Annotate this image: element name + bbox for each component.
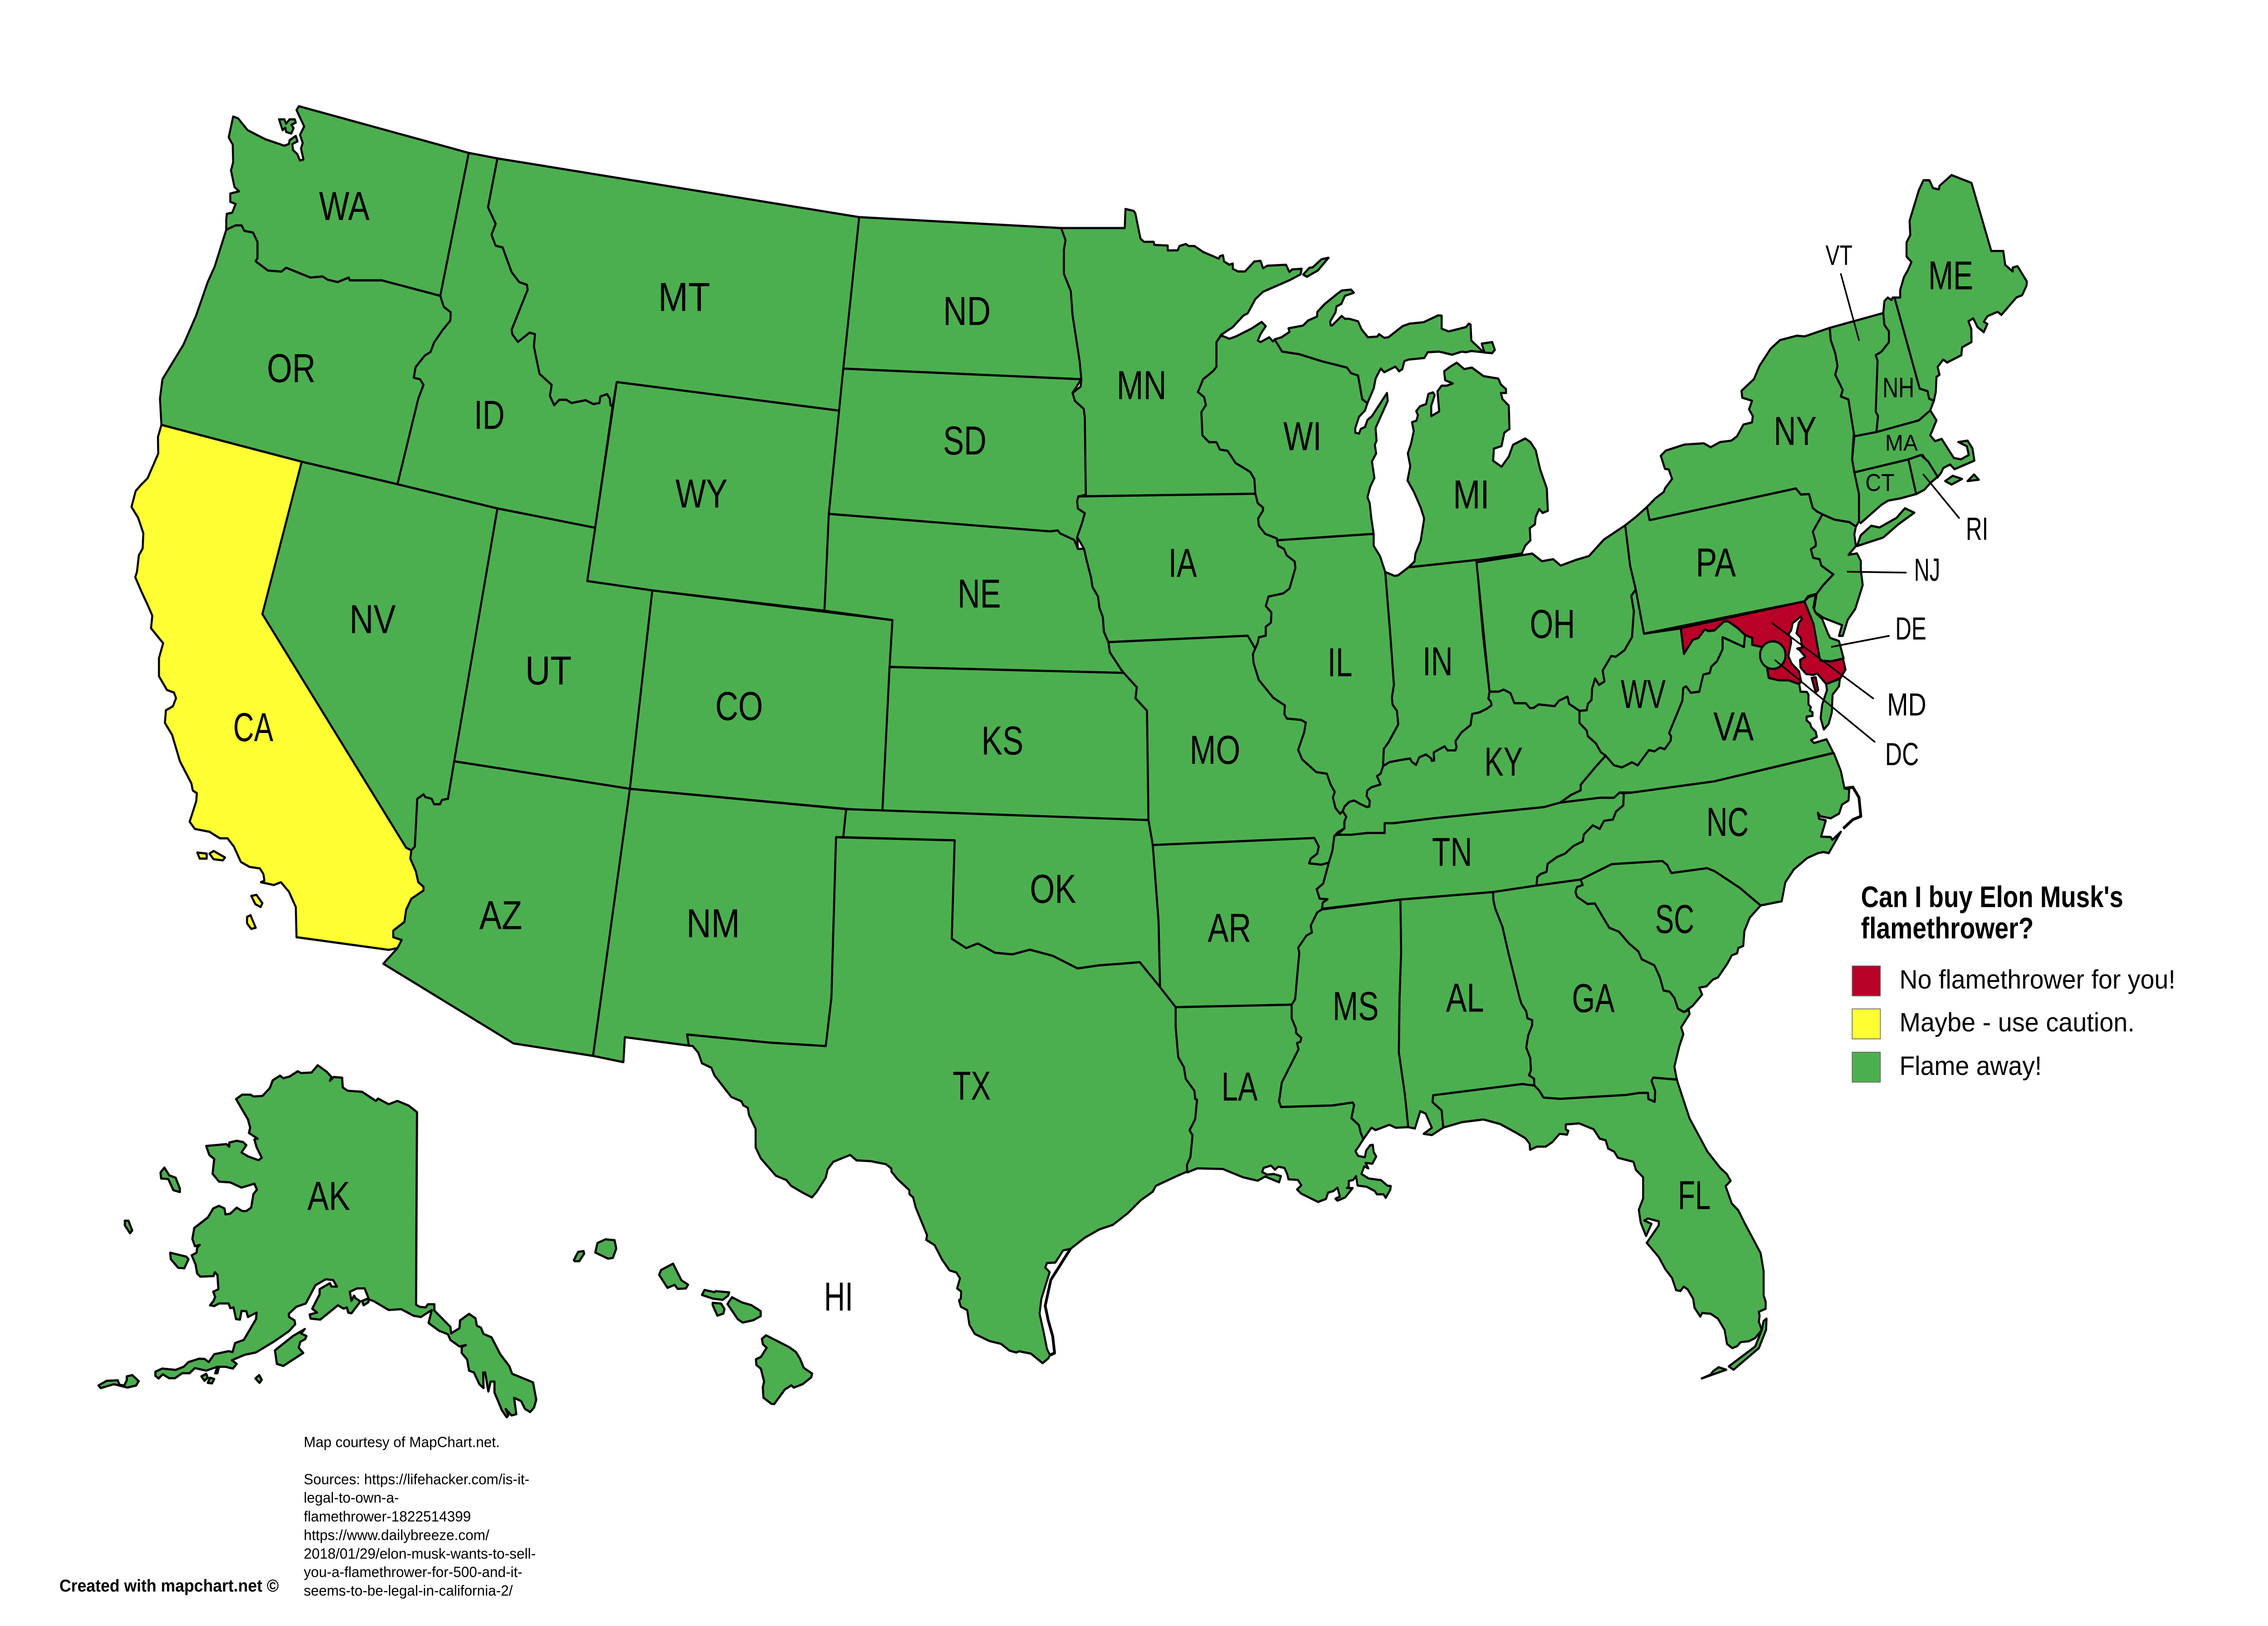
state abbreviation labels: AL [1446,976,1484,1021]
state abbreviation labels: WV [1621,672,1666,717]
state abbreviation labels: MT [658,274,710,320]
state abbreviation labels: OR [267,346,316,391]
state: Washington [226,106,469,296]
sources text block [304,1433,536,1599]
state abbreviation labels: CA [233,705,274,750]
district: DC circle [1760,641,1785,669]
legend [1852,881,2175,1082]
state abbreviation labels: OK [1030,867,1076,912]
state: Minnesota [1061,209,1329,496]
state abbreviation labels: UT [525,648,572,693]
state: Georgia [1493,879,1690,1102]
state: Virginia [1560,635,1840,802]
state: Missouri [1109,636,1346,865]
state abbreviation labels [233,184,1988,1319]
legend heading: flamethrower? [1861,912,2033,945]
state: South Dakota [829,369,1086,549]
state abbreviation labels: KS [982,718,1023,763]
state abbreviation labels: IL [1328,640,1353,685]
state: New Hampshire [1876,298,1934,432]
state: Alabama [1399,892,1535,1135]
legend swatch: red [1852,966,1880,996]
state abbreviation labels: FL [1678,1173,1711,1218]
state: South Carolina [1575,861,1760,1012]
state abbreviation labels: NE [958,571,1001,616]
state: West Virginia [1579,590,1745,767]
state: Pennsylvania [1625,488,1833,634]
legend label: green: Flame away! [1899,1051,2042,1081]
state: Tennessee [1317,792,1624,909]
state abbreviation labels: NC [1706,800,1749,845]
state abbreviation labels: WA [319,184,370,229]
state abbreviation labels: HI [824,1274,853,1319]
state: Maryland [1681,601,1846,693]
state abbreviation labels: MA [1885,430,1918,456]
state abbreviation labels: NH [1882,372,1914,403]
state: Arizona [383,762,630,1056]
state abbreviation labels: MI [1453,472,1489,518]
legend swatch: green [1852,1052,1880,1082]
state: Utah [454,508,652,789]
state abbreviation labels: IN [1422,639,1453,684]
state abbreviation labels: PA [1696,540,1736,586]
state: Kentucky [1337,689,1606,835]
state: Louisiana [1176,1005,1391,1202]
state abbreviation labels: CT [1865,469,1895,496]
Alaska: small islands [201,1298,368,1383]
state abbreviation labels: WY [675,471,728,517]
state abbreviation labels: VT [1826,239,1853,271]
state: Rhode Island [1908,455,1938,494]
sources text block: Map courtesy of MapChart.net. [304,1433,500,1450]
Alaska: St Matthew Island [125,1221,132,1233]
state: Oregon [160,225,451,484]
state abbreviation labels: MD [1887,687,1926,723]
state abbreviation labels: ND [943,288,991,334]
state: Nebraska [825,514,1124,673]
state: Wisconsin [1198,322,1388,540]
state abbreviation labels: GA [1572,976,1615,1021]
state: Mississippi [1279,899,1408,1139]
state: New York [1647,328,1914,546]
state abbreviation labels: LA [1222,1064,1258,1109]
state abbreviation labels: TN [1432,830,1472,875]
state: Ohio [1476,525,1636,711]
state abbreviation labels: MN [1117,363,1167,408]
sources text block: https://www.dailybreeze.com/ [304,1527,489,1543]
state: Alaska [98,1065,536,1417]
Alaska: Nunivak Island [170,1253,189,1268]
state abbreviation labels: NM [686,901,740,946]
state: New Jersey [1811,514,1863,636]
legend label: yellow: Maybe - use caution. [1899,1007,2135,1037]
state: Illinois [1253,534,1398,814]
state: Vermont [1830,313,1889,436]
state: Arkansas [1153,838,1329,1007]
state: North Dakota [843,217,1099,379]
state abbreviation labels: IA [1168,541,1197,586]
state: Wyoming [587,382,841,611]
state abbreviation labels: CO [715,684,763,729]
state: California [132,425,424,950]
state: New Mexico [593,789,846,1062]
state abbreviation labels: TX [953,1064,991,1108]
state abbreviation labels: MS [1333,984,1379,1029]
state abbreviation labels: RI [1966,511,1988,547]
state abbreviation labels: ME [1928,253,1973,298]
sources text block: 2018/01/29/elon-musk-wants-to-sell- [304,1545,536,1562]
legend label: red: No flamethrower for you! [1899,964,2175,994]
state: Oklahoma [843,809,1160,987]
state: Nevada [262,462,498,850]
state: Michigan [1275,289,1548,567]
state: Montana [488,158,859,411]
state abbreviation labels: NV [349,597,396,642]
leader lines for small states [1772,274,1959,742]
sources text block: legal-to-own-a- [304,1489,399,1506]
state abbreviation labels: OH [1530,602,1575,647]
state abbreviation labels: AZ [479,893,522,938]
state abbreviation labels: MO [1190,728,1240,773]
state: Idaho [397,153,612,528]
credit: created with mapchart: Created with mapchart.net © [59,1576,279,1595]
state abbreviation labels: KY [1484,739,1523,785]
Alaska: Aleutian island [98,1375,139,1388]
Alaska: St Lawrence Island [161,1167,180,1192]
state: Iowa [1077,494,1295,649]
state: Connecticut [1854,459,1916,523]
Alaska: Kodiak Island [275,1329,307,1366]
state: Delaware [1804,595,1843,661]
state: Hawaii [574,1239,812,1404]
state: Florida [1432,1078,1766,1378]
state: Maine [1895,175,2027,401]
state abbreviation labels: DC [1885,737,1919,772]
sources text block: flamethrower-1822514399 [304,1508,471,1525]
state abbreviation labels: AK [308,1173,350,1219]
state: North Carolina [1536,753,1861,905]
state: Kansas [882,667,1149,820]
state abbreviation labels: NY [1774,409,1817,454]
sources text block: seems-to-be-legal-in-california-2/ [304,1582,513,1599]
state abbreviation labels: NJ [1914,552,1940,588]
state abbreviation labels: SD [943,418,987,464]
state abbreviation labels: ID [474,392,505,438]
state: Colorado [630,591,892,812]
sources text block: you-a-flamethrower-for-500-and-it- [304,1563,523,1580]
state: Indiana [1383,560,1491,766]
map of the United States [98,106,2027,1417]
state abbreviation labels: DE [1895,611,1926,646]
state abbreviation labels: AR [1208,906,1251,951]
state abbreviation labels: WI [1283,414,1322,459]
legend swatch: yellow [1852,1009,1880,1039]
state: Texas [687,837,1197,1363]
state abbreviation labels: SC [1655,897,1694,942]
Alaska mainland [156,1065,536,1417]
sources text block: Sources: https://lifehacker.com/is-it- [304,1470,529,1488]
legend heading: Can I buy Elon Musk's [1861,881,2123,914]
state abbreviation labels: VA [1713,704,1754,749]
state: Massachusetts [1852,410,1979,484]
